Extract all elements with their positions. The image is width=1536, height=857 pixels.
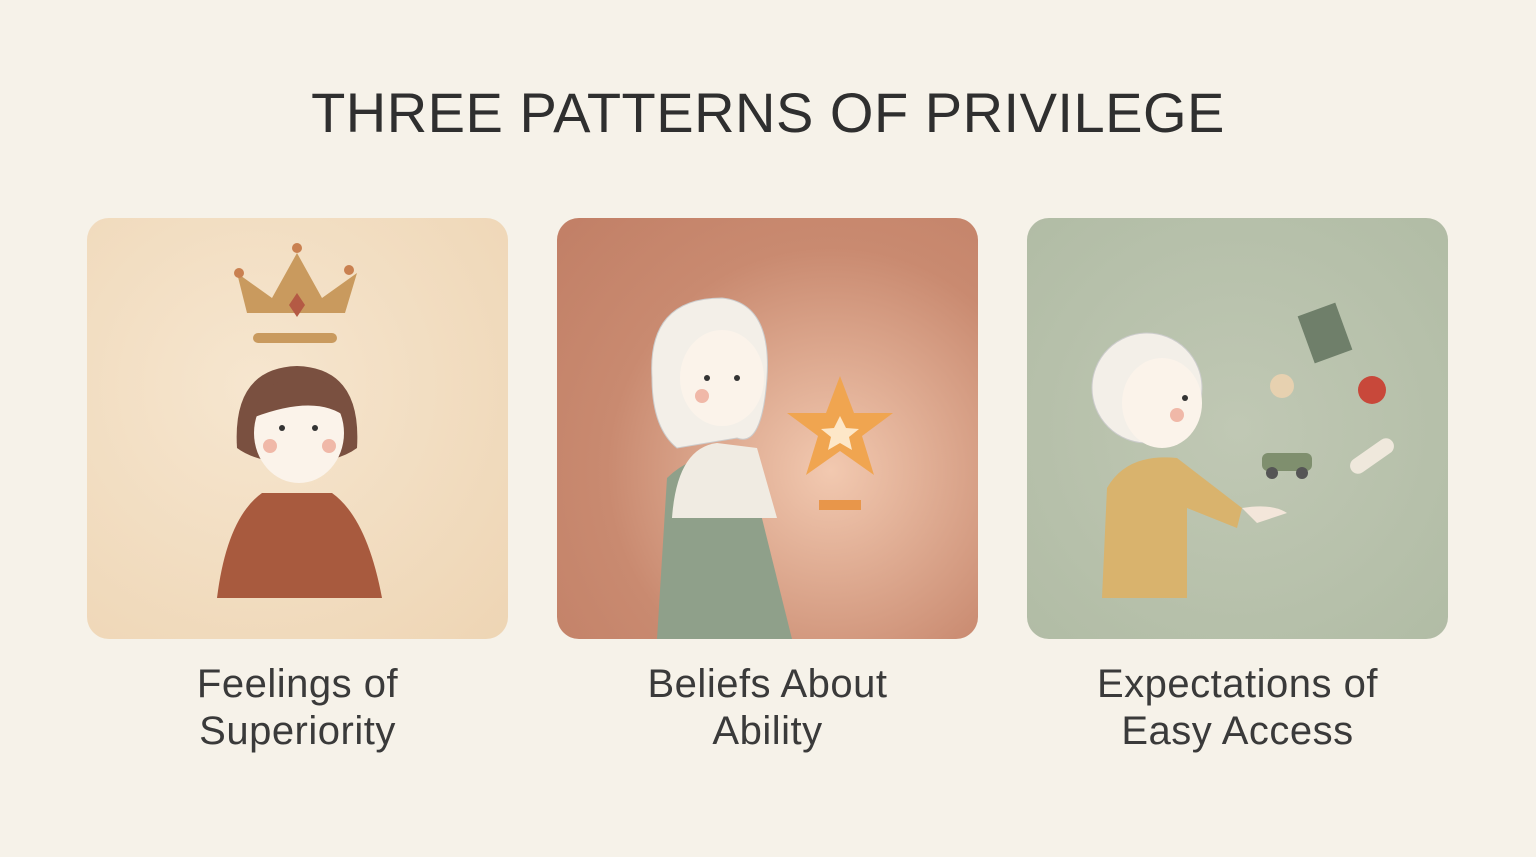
panel: superiority bbox=[87, 218, 508, 639]
label: superiority: Feelings of bbox=[197, 662, 398, 706]
label: easy access: Easy Access bbox=[1121, 709, 1354, 753]
icons: floating items bbox=[1262, 303, 1397, 479]
label: superiority: Superiority bbox=[199, 709, 396, 753]
child figure bbox=[1092, 333, 1287, 598]
label: easy access bbox=[1097, 662, 1378, 753]
label: ability bbox=[648, 662, 888, 753]
title: THREE PATTERNS OF PRIVILEGE bbox=[311, 81, 1225, 144]
icon: crown bbox=[234, 243, 357, 343]
label: easy access: Expectations of bbox=[1097, 662, 1378, 706]
label: ability: Ability bbox=[712, 709, 823, 753]
panel: ability bbox=[557, 218, 978, 639]
child figure bbox=[217, 366, 382, 598]
child figure bbox=[652, 298, 792, 639]
label: ability: Beliefs About bbox=[648, 662, 888, 706]
panel: easy access bbox=[1027, 218, 1448, 639]
label: superiority bbox=[197, 662, 398, 753]
icon: star trophy bbox=[787, 376, 893, 510]
